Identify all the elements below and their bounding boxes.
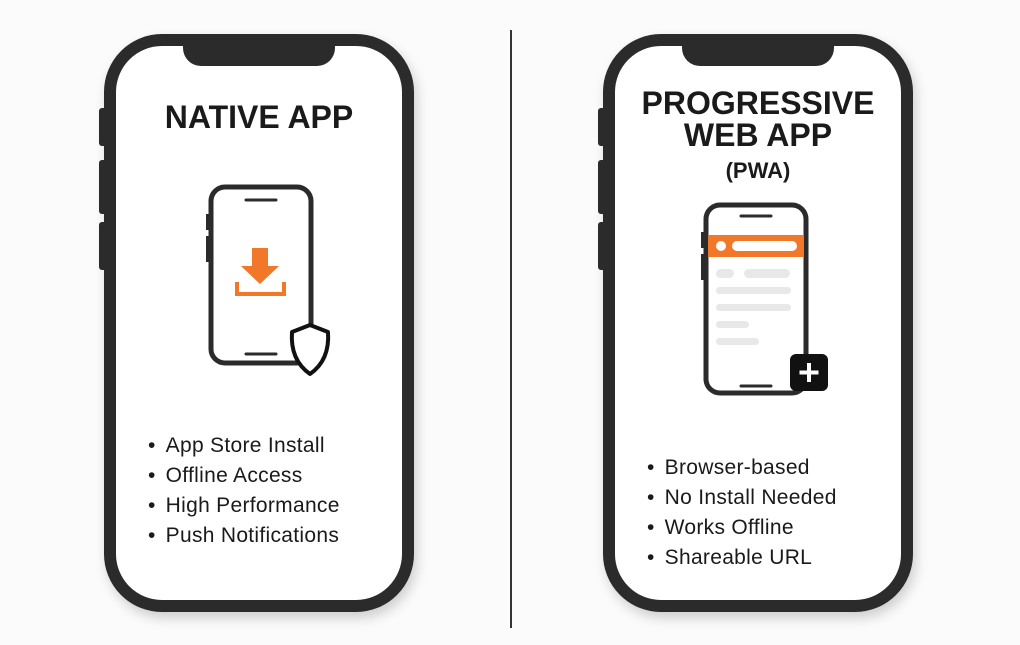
title: pwa: (PWA) [726,158,790,183]
divider [510,30,512,628]
icon: phone with browser and plus [701,202,828,396]
list: native app features: High Performance [166,494,340,517]
list: native app features [148,434,340,547]
list: pwa features: No Install Needed [665,486,837,509]
panel: pwa phone [603,34,913,612]
title: pwa [642,85,874,183]
title: pwa: PROGRESSIVE [642,85,874,121]
list: pwa features: Shareable URL [665,546,812,569]
title: pwa: WEB APP [684,117,832,153]
list: native app features: App Store Install [166,434,325,457]
list: native app features: Push Notifications [166,524,339,547]
list: pwa features: Browser-based [665,456,810,479]
list: native app features: Offline Access [166,464,303,487]
list: pwa features [648,456,837,569]
panel: native app phone [104,34,414,612]
title: native app: NATIVE APP [165,99,353,135]
icon: phone with download and shield [206,184,330,376]
list: pwa features: Works Offline [665,516,794,539]
